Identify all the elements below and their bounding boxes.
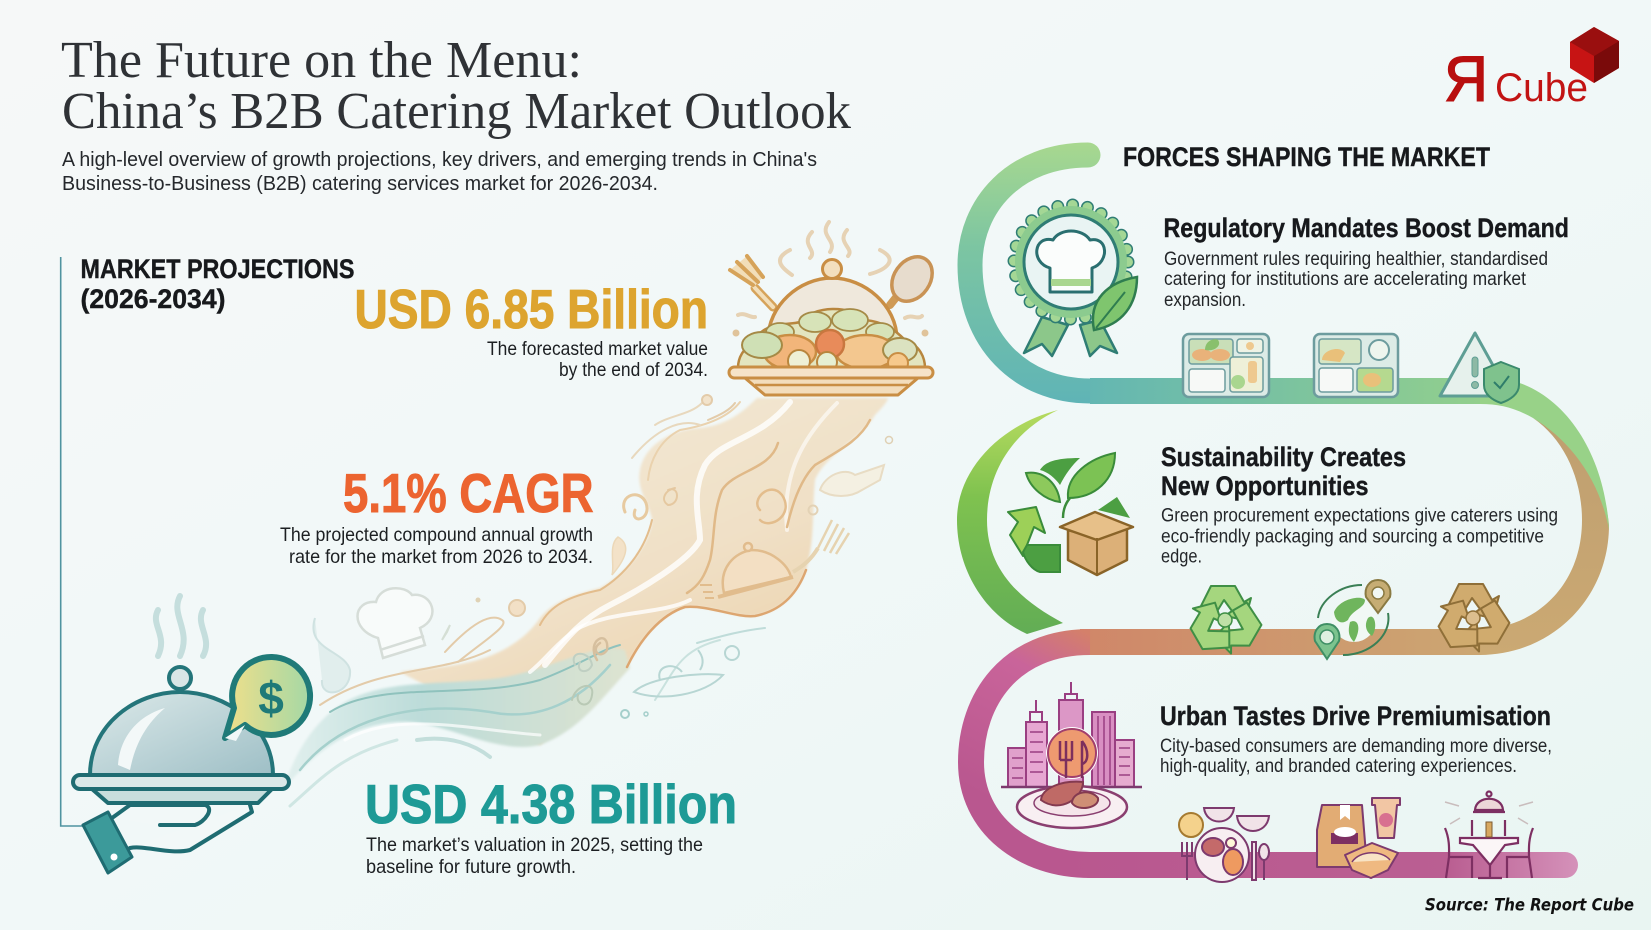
text: urban tastes: City-based consumers are demanding more diverse, (1160, 736, 1552, 757)
title (61, 32, 851, 140)
text: urban tastes: Urban Tastes Drive Premiumisation (1160, 701, 1551, 731)
icon: takeaway bag, cup and box (1317, 798, 1400, 878)
stat: 5.1% CAGR: rate for the market from 2026 to 2034. (289, 546, 593, 568)
title: The Future on the Menu: (61, 32, 582, 89)
stat: USD 4.38 Billion: baseline for future growth. (366, 856, 576, 878)
icon: green recycle (1183, 586, 1267, 660)
stat: USD 4.38 Billion: USD 4.38 Billion (365, 773, 737, 835)
icon: faint plate sketch (634, 646, 739, 697)
icon: teal cloche on hand with dollar bubble (73, 596, 310, 873)
icon: meal tray 2 (1314, 334, 1398, 397)
icon: globe with pins (1315, 580, 1390, 659)
icon: dining table with cloche (1445, 792, 1533, 878)
stat: USD 6.85 Billion (354, 278, 708, 381)
text: sustainability: Sustainability Creates (1161, 442, 1406, 472)
heading: market projections (80, 254, 354, 314)
icon: chef hat badge with leaf (1014, 205, 1137, 356)
icon: leaves, recycling arrows and box (1008, 453, 1133, 575)
market projections bracket line (61, 257, 84, 826)
growth flow swoosh (283, 395, 892, 806)
stat: USD 4.38 Billion: The market’s valuation in 2025, setting the (366, 834, 703, 856)
icon: meal tray 1 (1183, 334, 1269, 397)
text: regulatory mandates: catering for institutions are accelerating market (1164, 269, 1527, 290)
text: regulatory mandates (1164, 213, 1569, 311)
icon: faint steam swirl (313, 618, 350, 692)
heading: market projections: MARKET PROJECTIONS (80, 254, 354, 284)
text: regulatory mandates: Regulatory Mandates Boost Demand (1164, 213, 1569, 243)
subtitle (62, 149, 817, 195)
icon: teal cloche on hand with dollar bubble: $ (258, 672, 284, 724)
text: sustainability (1161, 442, 1558, 568)
text: sustainability: edge. (1161, 546, 1202, 568)
text: sustainability: Green procurement expectations give caterers using (1161, 506, 1558, 526)
text: urban tastes (1160, 701, 1552, 777)
icon: faint chicken leg (820, 465, 884, 496)
subtitle: A high-level overview of growth projections, key drivers, and emerging trends in China's (62, 149, 817, 171)
icon: tan recycle (1431, 584, 1515, 658)
icon: golden dish with food (729, 222, 941, 395)
subtitle: Business-to-Business (B2B) catering services market for 2026-2034. (62, 173, 658, 195)
title: China’s B2B Catering Market Outlook (62, 83, 851, 140)
heading: forces shaping the market: FORCES SHAPING THE MARKET (1123, 142, 1490, 172)
icon: city skyline with plate (1001, 682, 1142, 828)
stat: USD 6.85 Billion: by the end of 2034. (559, 359, 708, 381)
stat: 5.1% CAGR: The projected compound annual growth (280, 524, 593, 546)
logo (1444, 27, 1619, 115)
logo: Cube (1495, 66, 1588, 110)
ribbon: green crescent (957, 410, 1063, 634)
ribbon: serpentine path (970, 155, 1609, 865)
stat: 5.1% CAGR: 5.1% CAGR (343, 462, 594, 524)
text: sustainability: New Opportunities (1161, 471, 1368, 501)
stat: 5.1% CAGR (280, 462, 594, 568)
text: regulatory mandates: expansion. (1164, 290, 1246, 311)
icon: faint cloche in flow (700, 543, 793, 598)
text: regulatory mandates: Government rules requiring healthier, standardised (1164, 249, 1548, 270)
heading: market projections: (2026-2034) (80, 284, 226, 314)
stat: USD 6.85 Billion: USD 6.85 Billion (354, 278, 708, 340)
text: urban tastes: high-quality, and branded catering experiences. (1160, 756, 1517, 777)
icon: warning triangle and shield (1440, 333, 1519, 403)
text: sustainability: eco-friendly packaging and sourcing a competitive (1161, 526, 1544, 548)
stat: USD 6.85 Billion: The forecasted market value (487, 338, 708, 360)
logo: Я (1444, 43, 1488, 115)
icon: plated dishes with cutlery (1179, 808, 1269, 882)
stat: USD 4.38 Billion (365, 773, 737, 878)
icon: faint chef hat in flow (358, 588, 432, 658)
icon: faint fork in flow (793, 520, 849, 572)
